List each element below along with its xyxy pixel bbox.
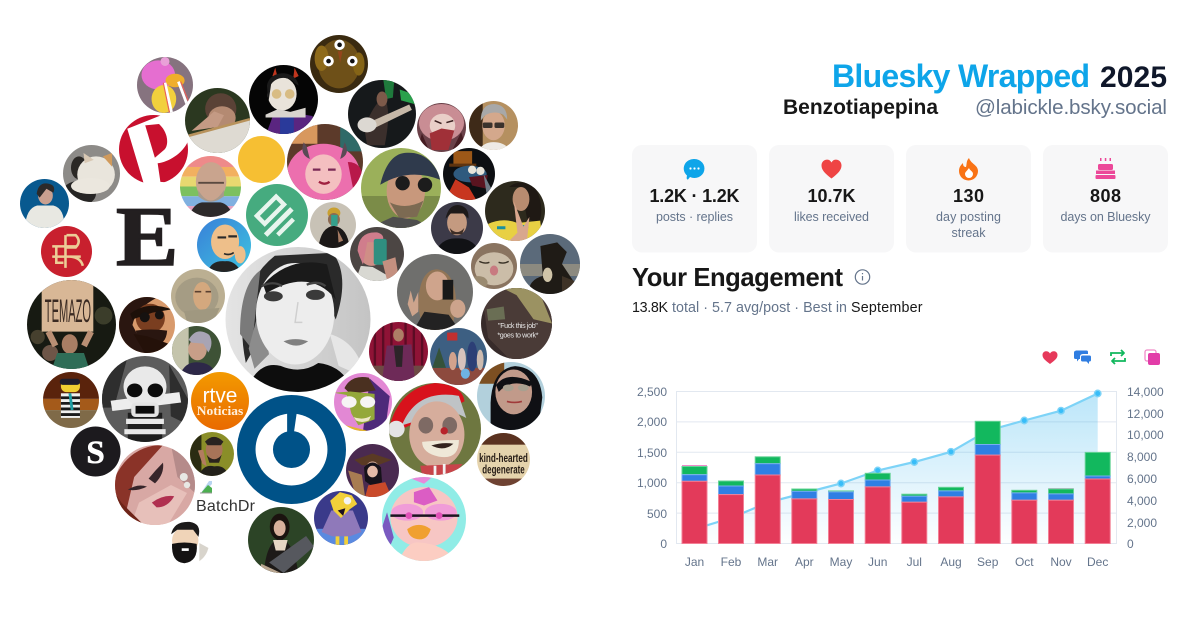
avatar: Gonzo puppet — [443, 148, 495, 200]
avatar: pink Furby cartoon — [382, 477, 466, 561]
avatar: person behind hand and paper — [185, 88, 250, 153]
right axis labels: 14,000 — [1127, 385, 1164, 399]
avatar: anime man with caption — [481, 288, 552, 359]
avatar: man in bucket hat and sunglasses — [361, 148, 441, 228]
stat card: posting streak: streak — [952, 226, 986, 240]
right axis labels: 0 — [1127, 537, 1134, 551]
avatar: Einstein caricature — [171, 269, 225, 323]
avatar: dark horse painting — [520, 234, 580, 294]
right axis labels: 2,000 — [1127, 516, 1157, 530]
avatar: horned girl drawing — [249, 65, 318, 134]
left axis labels: 500 — [647, 507, 667, 521]
stat card: posting streak: 130 — [953, 186, 984, 206]
icon: info — [855, 270, 870, 284]
chart legend icons — [1042, 350, 1160, 365]
profile name and handle — [783, 96, 1167, 119]
avatar: serif E logo: E — [116, 190, 178, 284]
avatar: person with grey short hair in profile — [172, 326, 221, 375]
avatar: purple robed Simpsons character — [314, 491, 368, 545]
avatar: pink duck with lasers — [137, 57, 193, 113]
stat card: days on Bluesky — [1043, 145, 1168, 252]
broken image placeholder with alt text: BatchDr — [196, 498, 256, 515]
stat card: likes received — [769, 145, 894, 252]
avatar: green goblin with glasses — [334, 373, 392, 431]
month labels: Mar — [757, 555, 778, 569]
left axis labels: 0 — [660, 537, 667, 551]
month labels: Dec — [1087, 555, 1108, 569]
avatar: green logo — [246, 184, 308, 246]
avatar: S logo — [70, 426, 120, 476]
month labels: Jun — [868, 555, 887, 569]
avatar bubble cluster — [20, 35, 580, 573]
section heading: Your Engagement — [632, 264, 843, 292]
month labels: Aug — [940, 555, 962, 569]
stat card: posting streak — [906, 145, 1031, 252]
avatar: anime man with caption: "Fuck this job" — [498, 322, 538, 330]
avatar: rtve Noticias logo: rtve — [203, 385, 237, 408]
icon: reposts — [1111, 350, 1125, 364]
avatar: protester holding Temazo sign — [27, 280, 116, 369]
icon: heart — [822, 160, 842, 178]
engagement chart — [637, 385, 1164, 569]
stat card: likes received: 10.7K — [808, 186, 856, 206]
avatar: red P logo — [119, 115, 188, 182]
avatar: skeleton drawing — [102, 356, 188, 442]
stat card: days on Bluesky: 808 — [1090, 186, 1121, 206]
stat card: days on Bluesky: days on Bluesky — [1060, 210, 1151, 224]
avatar: bald cartoon man on phone — [197, 218, 251, 272]
stat card: posts and replies — [632, 145, 757, 252]
avatar: clown in Santa hat — [389, 383, 481, 475]
month labels: Nov — [1050, 555, 1072, 569]
avatar: blue ring logo — [237, 395, 346, 504]
stat card: posting streak: day posting — [936, 210, 1001, 224]
avatar: white cat with person — [63, 145, 120, 202]
month labels: Oct — [1015, 555, 1034, 569]
avatar: sleepy hamster — [471, 243, 517, 289]
avatar: anime man with caption: *goes to work* — [497, 332, 539, 340]
avatar: boy in white sweatshirt on blue — [20, 179, 69, 228]
avatar: man with round sunglasses — [119, 297, 175, 353]
icon: likes — [1042, 351, 1058, 364]
month labels: Jul — [907, 555, 922, 569]
right axis labels: 4,000 — [1127, 494, 1157, 508]
stat card: likes received: likes received — [794, 210, 869, 224]
month labels — [685, 555, 1108, 569]
engagement summary: total · 5.7 avg/post · Best in — [672, 300, 847, 316]
avatar: dark suited man — [431, 202, 483, 254]
engagement summary: September — [851, 300, 923, 316]
avatar: serif E logo — [94, 187, 194, 287]
engagement summary: 13.8K — [632, 300, 668, 316]
stat card: posts and replies: posts · replies — [656, 210, 733, 224]
icon: chat bubble — [684, 159, 704, 180]
month labels: Sep — [977, 555, 999, 569]
icon: quotes — [1145, 350, 1160, 365]
avatar: blonde mirror selfie with peace sign — [397, 254, 473, 330]
avatar: red monogram badge — [41, 226, 92, 277]
avatar: bearded man with green glow — [190, 432, 234, 476]
month labels: Jan — [685, 555, 704, 569]
avatar: plain yellow disc — [238, 136, 285, 183]
avatar: large monochrome portrait of woman — [226, 247, 370, 392]
avatar: pink haired phone selfie — [350, 227, 404, 281]
broken image placeholder with alt text — [196, 481, 256, 515]
right axis labels: 8,000 — [1127, 450, 1157, 464]
avatar: guitarist on stage — [348, 80, 416, 148]
icon: birthday cake — [1096, 158, 1116, 179]
avatar: long haired man with peace sign — [485, 181, 545, 241]
avatar: family group scene — [430, 328, 487, 385]
avatar: rtve Noticias logo: Noticias — [197, 404, 243, 418]
left axis labels: 2,000 — [637, 415, 667, 429]
avatar: S logo: S — [86, 435, 105, 471]
right axis labels: 6,000 — [1127, 472, 1157, 486]
avatar: smiling man on rainbow flag — [180, 156, 241, 217]
stacked bars by month — [682, 421, 1110, 544]
left axis labels: 2,500 — [637, 385, 667, 399]
month labels: May — [830, 555, 852, 569]
avatar: bearded cartoon man — [171, 522, 208, 564]
left axis labels — [637, 385, 667, 551]
icon: flame — [959, 158, 978, 180]
title: Bluesky Wrapped — [832, 58, 1090, 94]
cumulative area — [694, 394, 1098, 544]
left axis labels: 1,500 — [637, 446, 667, 460]
avatar: bearded bard drawing — [346, 444, 399, 497]
avatar: anime pink hair girl — [417, 103, 466, 152]
avatar: woman with glasses and dark hair — [477, 362, 545, 430]
left axis labels: 1,000 — [637, 476, 667, 490]
icon: replies — [1074, 350, 1091, 364]
profile name and handle: Benzotiapepina — [783, 96, 938, 119]
avatar: red haired woman close-up — [115, 445, 195, 525]
avatar: woman with hurdy-gurdy in garden — [248, 507, 314, 573]
cumulative line — [694, 390, 1101, 529]
avatar: mirror selfie with yellow hat — [310, 202, 356, 248]
right axis labels: 10,000 — [1127, 428, 1164, 442]
month labels: Apr — [795, 555, 814, 569]
avatar: rtve Noticias logo — [191, 372, 249, 430]
right axis labels — [1127, 385, 1164, 551]
avatar: man in red suit and curtain — [369, 322, 428, 381]
month labels: Feb — [721, 555, 742, 569]
profile name and handle: @labickle.bsky.social — [975, 96, 1167, 119]
right axis labels: 12,000 — [1127, 407, 1164, 421]
avatar: kind-hearted degenerate badge — [477, 433, 530, 486]
avatar: grey haired man in glasses — [469, 101, 518, 150]
title: 2025 — [1100, 61, 1167, 94]
engagement summary — [632, 300, 923, 316]
avatar: three eyed owl — [310, 35, 368, 93]
stat card: posts and replies: 1.2K · 1.2K — [650, 186, 740, 206]
avatar: pink haired demon — [287, 124, 363, 200]
avatar: striped cartoon burglar — [43, 372, 99, 428]
